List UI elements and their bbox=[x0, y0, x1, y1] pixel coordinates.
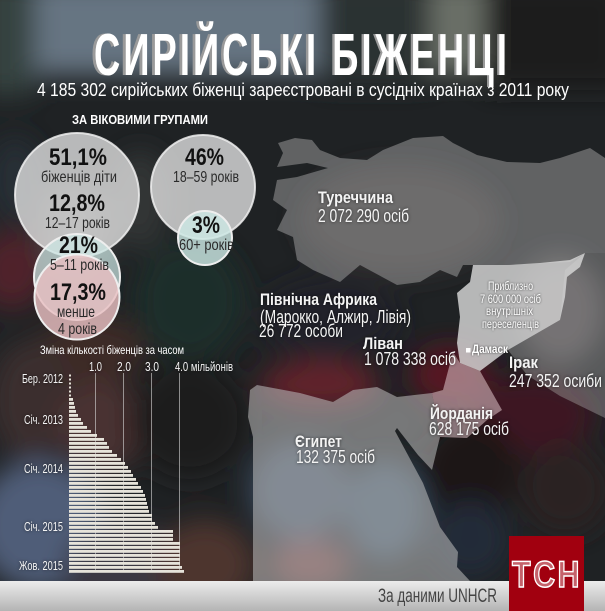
axis values: 1.0 bbox=[89, 359, 102, 374]
time labels: Бер. 2012 bbox=[22, 371, 63, 386]
axis values: 2.0 bbox=[117, 359, 131, 374]
label: Jordan bbox=[429, 404, 509, 439]
circle: 18-59 bbox=[151, 135, 255, 239]
label: Syria internally displaced: Приблизно bbox=[488, 279, 533, 293]
label: Syria internally displaced: 7 600 000 осіб bbox=[480, 292, 541, 306]
label: Turkey bbox=[318, 188, 409, 226]
label: 3%: 3% bbox=[192, 212, 220, 239]
map: Iraq bbox=[508, 253, 605, 418]
age groups heading: ЗА ВІКОВИМИ ГРУПАМИ bbox=[72, 112, 208, 127]
axis values bbox=[89, 359, 233, 374]
label: Lebanon: Ліван bbox=[363, 334, 403, 353]
source bar bbox=[0, 581, 605, 611]
logo: TCH: ТСН bbox=[512, 554, 582, 595]
label: Egypt bbox=[295, 432, 375, 467]
circle: children total bbox=[15, 133, 139, 257]
label: Turkey: Туреччина bbox=[318, 188, 393, 207]
label: Syria internally displaced: переселенців bbox=[482, 317, 539, 331]
label: 4 years: 4 років bbox=[58, 321, 97, 338]
label: Lebanon: 1 078 338 осіб bbox=[364, 349, 456, 369]
map: Egypt and Sinai bbox=[248, 385, 470, 581]
label: 21%: 21% bbox=[59, 232, 98, 259]
circle: 5-11 bbox=[34, 234, 120, 320]
label: 46%: 46% bbox=[185, 144, 224, 171]
label: children: біженців діти bbox=[41, 169, 117, 186]
label: 12-17: 12–17 років bbox=[45, 215, 110, 232]
label: Egypt: 132 375 осіб bbox=[296, 447, 375, 467]
label: 60+: 60+ років bbox=[179, 237, 234, 254]
label: Syria internally displaced bbox=[480, 279, 541, 331]
time labels bbox=[19, 371, 63, 573]
label: Lebanon bbox=[363, 334, 456, 369]
label: 5-11: 5–11 років bbox=[50, 257, 109, 274]
label: North Africa: 26 772 особи bbox=[259, 321, 343, 341]
map: Syria bbox=[457, 253, 585, 371]
map: Turkey bbox=[273, 136, 605, 285]
label: Egypt: Єгипет bbox=[295, 432, 342, 451]
label: Iraq bbox=[509, 353, 602, 391]
circle: 60+ bbox=[178, 211, 232, 265]
time labels: Січ. 2015 bbox=[24, 519, 63, 534]
label: North Africa: Північна Африка bbox=[260, 290, 377, 309]
label: Iraq: Ірак bbox=[509, 353, 538, 372]
map: Jordan and coast bbox=[432, 352, 502, 438]
label: under: менше bbox=[57, 304, 95, 321]
label: Damascus: Дамаск bbox=[472, 342, 509, 356]
circle: under 4 bbox=[34, 254, 120, 340]
axis values: 4.0 мільйонів bbox=[175, 359, 233, 374]
label: North Africa: (Марокко, Алжир, Лівія) bbox=[260, 307, 411, 327]
bar chart: refugees over time bbox=[19, 359, 233, 573]
label: 17,3%: 17,3% bbox=[50, 279, 106, 306]
time labels: Січ. 2014 bbox=[24, 461, 63, 476]
label: 18-59: 18–59 років bbox=[173, 169, 239, 186]
label: 51,1%: 51,1% bbox=[49, 144, 107, 171]
label: 12,8%: 12,8% bbox=[49, 190, 105, 217]
label: Jordan: Йорданія bbox=[430, 404, 493, 423]
time labels: Січ. 2013 bbox=[24, 412, 63, 427]
label: North Africa bbox=[259, 290, 411, 341]
label: Turkey: 2 072 290 осіб bbox=[318, 206, 409, 226]
panel: age circles bbox=[15, 133, 255, 340]
time labels: Жов. 2015 bbox=[19, 558, 63, 573]
label: Jordan: 628 175 осіб bbox=[429, 419, 509, 439]
axis values: 3.0 bbox=[145, 359, 159, 374]
label: Syria internally displaced: внутрішніх bbox=[486, 304, 533, 318]
source bar: За даними UNHCR bbox=[378, 586, 497, 607]
chart title: Зміна кількості біженців за часом bbox=[40, 343, 184, 357]
logo: TCH bbox=[509, 536, 584, 611]
